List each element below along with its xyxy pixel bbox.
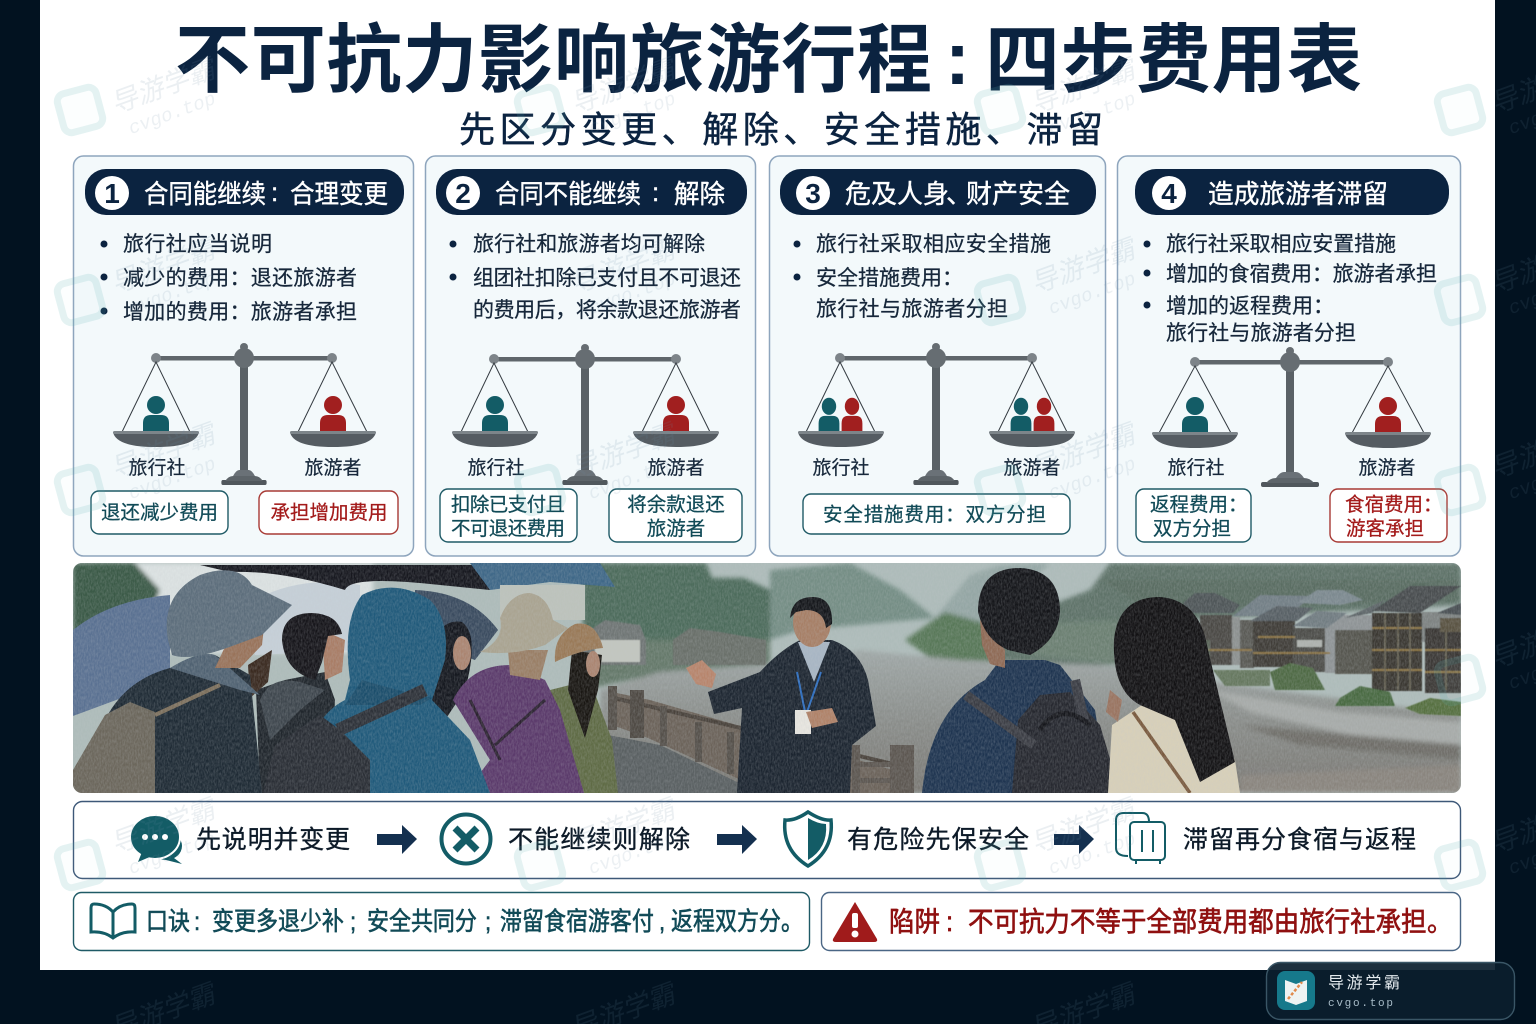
subtitle: 先区分变更、解除、安全措施、滞留 — [459, 109, 1103, 150]
logo badge — [1266, 962, 1514, 1020]
person: small face behind — [430, 622, 472, 720]
note: share safety — [803, 494, 1070, 534]
watermarks: cvgo.top — [586, 828, 679, 880]
watermarks: 导游学霸 — [107, 793, 221, 859]
mnemonic text: 返程双方分 — [671, 908, 781, 936]
note: deduct: 不可退还费用 — [451, 518, 565, 540]
note: remainder: 旅游者 — [647, 518, 705, 540]
label 2: 旅游者 — [647, 457, 705, 479]
note: return cost: 双方分担 — [1153, 518, 1231, 540]
icon: luggage — [1116, 813, 1165, 864]
person: man with backpack — [922, 568, 1120, 793]
arrow 1 — [377, 825, 417, 854]
note: return cost: 返程费用： — [1150, 494, 1248, 516]
brand url: cvgo.top — [1328, 998, 1393, 1010]
title: 四步费用表 — [985, 18, 1362, 102]
header 3: 3 — [805, 178, 821, 209]
balance scale 3 — [798, 343, 1075, 485]
icon: chat bubbles — [130, 815, 182, 864]
watermarks: 导游学霸 — [567, 418, 681, 484]
header 4 — [1135, 169, 1449, 215]
note: remainder: 将余款退还 — [627, 494, 725, 516]
label 3: 旅游者 — [1003, 457, 1061, 479]
distant houses — [583, 620, 766, 665]
person: olive jacket with brown hat — [550, 624, 618, 793]
title — [175, 16, 1362, 102]
watermarks: cvgo.top — [1046, 88, 1139, 140]
panel 3: personal safety — [770, 156, 1106, 556]
label 3 — [812, 457, 1061, 479]
panel 1: contract can continue — [74, 156, 414, 556]
header 4: 造成旅游者滞留 — [1208, 179, 1388, 209]
umbrellas — [73, 563, 615, 716]
watermarks: cvgo.top — [126, 828, 219, 880]
step: cancel: 不能继续则解除 — [508, 826, 690, 854]
warning text: 。 — [1427, 906, 1452, 937]
person: purple jacket with beige hat — [453, 593, 584, 793]
header 2: : — [652, 177, 659, 207]
watermarks: 导游学霸 — [567, 233, 681, 299]
bullets 4 — [1144, 233, 1437, 345]
watermarks: cvgo.top — [126, 268, 219, 320]
note: bear — [259, 491, 398, 534]
person: woman with long hair — [1106, 597, 1240, 793]
label 1: 旅行社 — [128, 457, 186, 479]
balance scale 1 — [113, 343, 376, 485]
village buildings — [1183, 586, 1461, 716]
arrow 3 — [1054, 825, 1094, 854]
step: safety: 有危险先保安全 — [847, 826, 1029, 854]
note: refund: 退还减少费用 — [101, 502, 218, 524]
watermarks: 导游学霸 — [567, 53, 681, 119]
warning text: 陷阱 — [889, 906, 940, 937]
label 4: 旅行社 — [1167, 457, 1225, 479]
arrow 2 — [717, 825, 757, 854]
watermarks: cvgo.top — [586, 268, 679, 320]
mnemonic text: ; — [485, 909, 491, 936]
watermarks: 导游学霸 — [1027, 233, 1141, 299]
watermarks: cvgo.top — [1046, 828, 1139, 880]
watermarks: cvgo.top — [1046, 268, 1139, 320]
note: remainder — [609, 489, 742, 542]
flow strip — [74, 802, 1460, 878]
icon: warning triangle — [833, 902, 877, 942]
header 2: 合同不能继续 — [495, 179, 641, 209]
person: blue hood — [263, 588, 490, 793]
balance scale 4 — [1152, 347, 1431, 487]
bullets 1: 旅行社应当说明 — [123, 233, 272, 256]
mnemonic text: ; — [350, 909, 356, 936]
label 4 — [1167, 457, 1416, 479]
mnemonic text: 安全共同分 — [367, 908, 477, 936]
note: refund — [91, 491, 228, 534]
label 4: 旅游者 — [1358, 457, 1416, 479]
bullets 2: 的费用后，将余款退还旅游者 — [473, 299, 741, 322]
bullets 4: 增加的返程费用： — [1166, 295, 1334, 318]
bullets 1 — [100, 233, 357, 324]
note: lodging cost: 食宿费用： — [1345, 494, 1443, 516]
header 3: 危及人身 — [845, 179, 949, 209]
header 2: 2 — [455, 178, 471, 209]
bullets 3: 旅行社采取相应安全措施 — [816, 233, 1051, 256]
header 1: : — [271, 177, 278, 207]
watermarks: cvgo.top — [126, 453, 219, 505]
label 2 — [467, 457, 705, 479]
bullets 4: 增加的食宿费用：旅游者承担 — [1166, 263, 1437, 286]
bullets 4: 旅行社与旅游者分担 — [1166, 322, 1356, 345]
rain texture overlay — [73, 563, 1461, 793]
warning text: 不可抗力不等于全部费用都由旅行社承担 — [968, 906, 1427, 937]
bullets 2 — [450, 233, 741, 322]
note: lodging cost: 游客承担 — [1346, 518, 1424, 540]
mnemonic text: : — [194, 909, 200, 936]
warning text: : — [946, 906, 953, 937]
title: : — [945, 16, 970, 100]
label 3: 旅行社 — [812, 457, 870, 479]
icon: shield — [785, 812, 831, 866]
watermarks: cvgo.top — [1046, 453, 1139, 505]
watermarks: 导游学霸 — [107, 233, 221, 299]
header 3 — [780, 169, 1096, 215]
header 2 — [436, 169, 747, 215]
icon: map — [1277, 971, 1315, 1010]
header 1: 1 — [104, 178, 120, 209]
step: stranded: 滞留再分食宿与返程 — [1183, 826, 1416, 854]
person: guide — [686, 597, 876, 793]
watermarks: 导游学霸 — [107, 418, 221, 484]
label 1: 旅游者 — [304, 457, 362, 479]
watermarks: 导游学霸 — [567, 793, 681, 859]
person: grey hat with backpack — [73, 570, 292, 793]
note: bear: 承担增加费用 — [270, 502, 388, 524]
brand name: 导游学霸 — [1328, 974, 1400, 992]
header 2: 解除 — [674, 179, 725, 209]
watermarks: 导游学霸 — [1027, 53, 1141, 119]
bullets 3: 旅行社与旅游者分担 — [816, 298, 1008, 321]
watermarks: 导游学霸 — [1027, 418, 1141, 484]
watermarks: 导游学霸 — [107, 53, 221, 119]
note: deduct: 扣除已支付且 — [451, 494, 565, 516]
panel 4: stranded — [1118, 156, 1460, 556]
bullets 4: 旅行社采取相应安置措施 — [1166, 233, 1396, 256]
bullets 1: 增加的费用：旅游者承担 — [123, 301, 357, 324]
icon: cancel circle — [442, 814, 490, 864]
header 1: 合同能继续 — [144, 179, 266, 209]
watermarks: cvgo.top — [126, 88, 219, 140]
mnemonic box — [74, 892, 810, 950]
header 1 — [85, 169, 404, 215]
title: 不可抗力影响旅游行程 — [175, 18, 932, 102]
header 4: 4 — [1161, 178, 1177, 209]
mnemonic text: 口诀 — [146, 908, 190, 936]
step: explain: 先说明并变更 — [196, 826, 350, 854]
header 1: 合理变更 — [290, 179, 388, 209]
bullets 1: 减少的费用：退还旅游者 — [123, 267, 357, 290]
note: deduct — [440, 489, 577, 542]
mnemonic text: , — [659, 909, 665, 936]
icon: book — [91, 904, 135, 938]
header 3: 财产安全 — [966, 179, 1070, 209]
watermarks: 导游学霸 — [1027, 793, 1141, 859]
bridge railing and deck — [608, 686, 914, 793]
watermarks: cvgo.top — [586, 453, 679, 505]
note: lodging cost — [1330, 489, 1447, 542]
header 3: 、 — [946, 179, 972, 209]
mnemonic text: 。 — [781, 909, 803, 936]
mnemonic text: 滞留食宿游客付 — [500, 908, 654, 936]
watermarks: cvgo.top — [586, 88, 679, 140]
bullets 3 — [794, 233, 1051, 321]
bullets 2: 组团社扣除已支付且不可退还 — [473, 267, 741, 290]
balance scale 2 — [452, 344, 719, 485]
label 1 — [128, 457, 362, 479]
person: dark jacket behind, centre — [248, 613, 345, 793]
mnemonic text: 变更多退少补 — [212, 908, 344, 936]
photo: guide explaining to tourists in the rain by a river — [73, 563, 1461, 793]
bullets 3: 安全措施费用： — [816, 267, 963, 290]
label 2: 旅行社 — [467, 457, 525, 479]
note: return cost — [1136, 489, 1251, 542]
note: share safety: 安全措施费用：双方分担 — [823, 504, 1046, 526]
panel 2: contract cannot continue — [426, 156, 756, 556]
trap warning box — [822, 892, 1460, 950]
bullets 2: 旅行社和旅游者均可解除 — [473, 233, 705, 256]
